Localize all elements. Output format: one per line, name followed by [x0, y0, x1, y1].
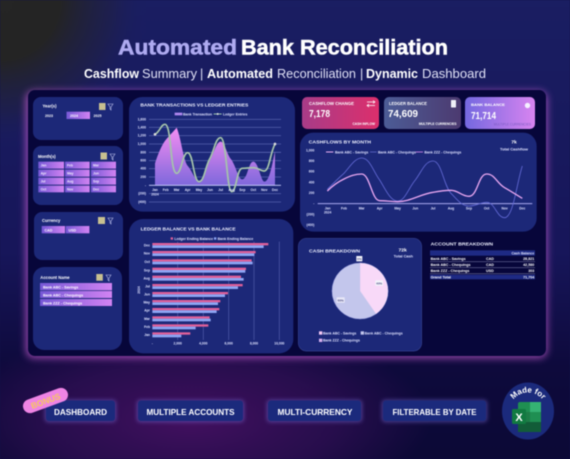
month labels: Apr: [185, 188, 191, 192]
feature pill: dashboard: [45, 400, 116, 422]
month labels: Nov: [501, 206, 508, 210]
feature pill: multiple accounts: MULTIPLE ACCOUNTS: [146, 407, 235, 417]
panel: currency slicer: Currency: [42, 218, 61, 223]
legend: [326, 150, 461, 154]
month labels: 2024: [324, 210, 332, 214]
axis labels: Feb: [144, 325, 150, 329]
y axis labels: 200: [309, 191, 314, 195]
table: account breakdown: Cash Balance: [511, 251, 534, 255]
month labels: Jan: [152, 188, 158, 192]
total cashflow: 7k: [511, 139, 517, 145]
axis labels: -: [152, 342, 153, 346]
y axis labels: 400: [309, 180, 314, 184]
month labels: Jul: [218, 188, 223, 192]
y axis labels: [306, 148, 314, 227]
month labels: Mar: [359, 206, 365, 210]
axis labels: 10,000: [274, 342, 285, 346]
badge: bonus: BONUS: [30, 391, 62, 411]
pie chart: [332, 256, 388, 319]
month labels: Oct: [251, 188, 257, 192]
panel: month slicer: Sep: [93, 179, 99, 183]
panel: bank transactions vs ledger entries: [129, 97, 295, 212]
y axis labels: 800: [309, 159, 314, 163]
month labels: Aug: [228, 188, 235, 192]
panel: month slicer: Dec: [93, 187, 99, 191]
table: account breakdown: Bank ABC - Chequings: [431, 263, 471, 267]
subtitle: Cashflow: [84, 67, 139, 81]
grid and axes: 800: [140, 150, 146, 154]
panel: month slicer: Nov: [67, 187, 73, 191]
line: bank abc chequings: [327, 158, 522, 218]
legend: [171, 237, 253, 241]
badge: made for excel: [502, 382, 554, 440]
table: account breakdown: CAD: [486, 263, 494, 267]
kpi card: bank balance: [465, 97, 535, 129]
bars: bank ending balance: [152, 245, 264, 337]
month labels: 2024: [151, 192, 159, 196]
panel: currency slicer: USD: [68, 228, 76, 232]
subtitle: |: [360, 67, 363, 81]
grid and axes: 600: [140, 159, 146, 163]
subtitle: Summary: [142, 67, 198, 81]
axis labels: [137, 244, 285, 346]
panel: month slicer: Apr: [41, 171, 47, 175]
feature pill: multi-currency: [267, 400, 362, 422]
kpi card: ledger balance: 74,609: [388, 108, 418, 120]
kpi card: bank balance: MULTIPLE CURRENCIES: [494, 122, 531, 126]
grid and axes: [138, 117, 281, 204]
grid and axes: 1,000: [138, 142, 146, 146]
legend: Bank ZZZ - Chequings: [424, 150, 461, 154]
month labels: Jul: [431, 206, 435, 210]
month labels: May: [196, 188, 202, 192]
legend: Bank ZZZ - Chequings: [323, 339, 360, 343]
month labels: Feb: [341, 206, 347, 210]
month labels: Mar: [174, 188, 180, 192]
kpi card: ledger balance: LEDGER BALANCE: [389, 101, 427, 106]
axis labels: Jul: [145, 285, 150, 289]
table: account breakdown: USD: [486, 269, 494, 273]
table: account breakdown: Bank ABC - Savings: [431, 257, 466, 261]
chart title: LEDGER BALANCE VS BANK BALANCE: [141, 226, 236, 232]
y axis labels: 600: [309, 170, 314, 174]
axis labels: 4,000: [199, 342, 208, 346]
kpi card: cashflow change: 7,178: [309, 108, 330, 120]
subtitle: |: [200, 67, 203, 81]
table: account breakdown: CAD: [486, 257, 494, 261]
axis labels: 6,000: [224, 342, 233, 346]
month labels: May: [394, 206, 401, 210]
month labels: Sep: [466, 206, 472, 210]
axis labels: Aug: [144, 276, 150, 280]
table: account breakdown: 71,704: [523, 275, 535, 279]
kpi card: cashflow change: CASHFLOW CHANGE: [309, 101, 354, 106]
panel: currency slicer: CAD: [44, 228, 53, 232]
y axis labels: -: [313, 202, 314, 206]
pie chart: 60%: [338, 298, 344, 302]
axis labels: Oct: [144, 260, 151, 264]
panel: year slicer: 2025: [94, 114, 102, 118]
axis labels: 8,000: [250, 342, 258, 346]
panel: year slicer: 2023: [45, 114, 53, 118]
feature pill: dashboard: DASHBOARD: [54, 407, 107, 417]
dashboard glow: [26, 91, 547, 358]
axis labels: Jan: [144, 333, 150, 337]
total cash: Total Cash: [394, 254, 414, 258]
axis labels: Sep: [144, 268, 150, 272]
feature pill: multiple accounts: [137, 400, 244, 422]
axis labels: Dec: [144, 244, 150, 248]
legend: Ledger Entries: [223, 112, 247, 116]
legend: Bank Ending Balance: [218, 237, 253, 241]
axis labels: May: [144, 301, 150, 305]
table: account breakdown: Bank ZZZ - Chequings: [431, 269, 469, 273]
month labels: Aug: [448, 206, 454, 210]
table: account breakdown: [430, 241, 535, 279]
panel: account slicer: Bank ABC - Chequings: [43, 294, 83, 298]
feature pill: filterable by date: FILTERABLE BY DATE: [392, 407, 477, 417]
grid and axes: 1,600: [138, 117, 146, 121]
axis labels: Mar: [144, 317, 151, 321]
legend: Bank Transaction: [183, 112, 212, 116]
chart title: BANK TRANSACTIONS VS LEDGER ENTRIES: [140, 102, 249, 108]
chart title: CASHFLOWS BY MONTH: [309, 139, 371, 145]
panel: ledger balance vs bank balance: [129, 219, 293, 353]
month labels: Sep: [239, 188, 245, 192]
month labels: Feb: [163, 188, 169, 192]
legend: Bank ABC - Chequings: [378, 150, 416, 154]
y axis labels: 1,000: [306, 148, 314, 152]
panel: year slicer: Year(s): [42, 104, 57, 108]
month labels: Jun: [207, 188, 213, 192]
table: account breakdown: 28,821: [523, 257, 534, 261]
panel: month slicer: Feb: [67, 163, 73, 167]
total cashflow: Total Cashflow: [500, 147, 529, 152]
axis labels: Jun: [144, 293, 150, 297]
grid and axes: -: [145, 183, 146, 187]
kpi card: ledger balance: MULTIPLE CURRENCIES: [419, 122, 456, 126]
panel: cash breakdown: [298, 238, 422, 351]
month labels: Apr: [377, 206, 383, 210]
month labels: Nov: [261, 188, 268, 192]
subtitle: Dynamic: [366, 67, 418, 81]
panel: month slicer: Aug: [67, 179, 73, 183]
panel: year slicer: [33, 97, 123, 140]
panel: month slicer: Jun: [93, 171, 99, 175]
panel: currency slicer: [34, 212, 123, 260]
icon: excel logo: X: [515, 412, 523, 424]
pie chart: 0%: [357, 257, 362, 261]
panel: month slicer: May: [67, 171, 74, 175]
kpi card: bank balance: BANK BALANCE: [471, 102, 505, 107]
month labels: [324, 206, 526, 214]
panel: month slicer: Month(s): [38, 154, 56, 159]
month labels: Oct: [484, 206, 490, 210]
axis labels: 2024: [137, 286, 141, 294]
panel: month slicer: Jan: [41, 163, 46, 167]
area: bank transactions: [155, 128, 275, 185]
month labels: Dec: [272, 188, 278, 192]
legend: [175, 112, 247, 116]
legend: [319, 331, 403, 343]
total cashflow: [500, 139, 529, 152]
kpi card: ledger balance: [384, 97, 461, 129]
table title: ACCOUNT BREAKDOWN: [431, 241, 493, 247]
subtitle: Automated: [207, 67, 273, 81]
chart title: CASH BREAKDOWN: [309, 248, 360, 254]
bars: ledger ending balance: [152, 243, 268, 335]
month labels: Jun: [412, 206, 418, 210]
legend: Bank ABC - Savings: [323, 331, 356, 335]
kpi card: cashflow change: CASH INFLOW: [352, 122, 375, 126]
panel: account slicer: [33, 267, 122, 350]
total cash: 72k: [398, 247, 407, 253]
title: [118, 36, 448, 60]
subtitle: Reconciliation: [277, 67, 356, 81]
month labels: [151, 188, 278, 196]
feature pill: filterable by date: [382, 400, 487, 422]
kpi card: bank balance: 71,714: [471, 110, 496, 122]
month labels: Jan: [325, 206, 331, 210]
axis labels: Apr: [144, 309, 151, 313]
axis labels: 2,000: [173, 342, 182, 346]
panel: month slicer: Oct: [41, 187, 47, 191]
axis labels: Nov: [144, 252, 150, 256]
panel: year slicer: 2024: [70, 114, 78, 118]
subtitle: [84, 67, 486, 81]
panel: account slicer: Bank ABC - Savings: [43, 286, 78, 290]
month labels: Dec: [519, 206, 526, 210]
grid and axes: (200): [138, 192, 146, 196]
grid: [178, 242, 279, 340]
subtitle: Dashboard: [422, 67, 486, 81]
legend: Bank ABC - Savings: [335, 150, 368, 154]
badge: bonus: [21, 386, 70, 415]
table: account breakdown: Grand Total: [431, 275, 451, 279]
title: Bank Reconciliation: [241, 36, 448, 60]
y axis labels: (400): [307, 223, 314, 227]
grid and axes: 400: [140, 167, 146, 171]
grid and axes: (400): [138, 200, 146, 204]
total cash: [394, 247, 414, 258]
line: bank abc savings: [327, 174, 522, 202]
grid and axes: 1,200: [138, 134, 146, 138]
panel: account slicer: Account Name: [40, 275, 70, 280]
line: ledger entries: [154, 124, 276, 192]
panel: dashboard: [28, 90, 546, 356]
badge: made for excel: Made for: [510, 386, 546, 400]
grid and axes: 1,400: [138, 125, 146, 129]
table: account breakdown: 42,580: [523, 263, 534, 267]
grid and axes: 200: [140, 175, 146, 179]
title: Automated: [118, 36, 237, 60]
legend: Ledger Ending Balance: [174, 237, 213, 241]
panel: month slicer: Mar: [93, 163, 100, 167]
panel: month slicer: Jul: [41, 179, 46, 183]
panel: account slicer: Bank ZZZ - Chequings: [43, 301, 82, 305]
pie chart: 40%: [376, 281, 382, 285]
panel: month slicer: [33, 146, 123, 205]
legend: Bank ABC - Chequings: [365, 331, 403, 335]
table: account breakdown: 303: [528, 269, 534, 273]
feature pill: multi-currency: MULTI-CURRENCY: [278, 407, 353, 417]
kpi card: cashflow change: [302, 97, 379, 129]
panel: cashflows by month: [300, 133, 537, 232]
y axis labels: (200): [307, 212, 314, 216]
